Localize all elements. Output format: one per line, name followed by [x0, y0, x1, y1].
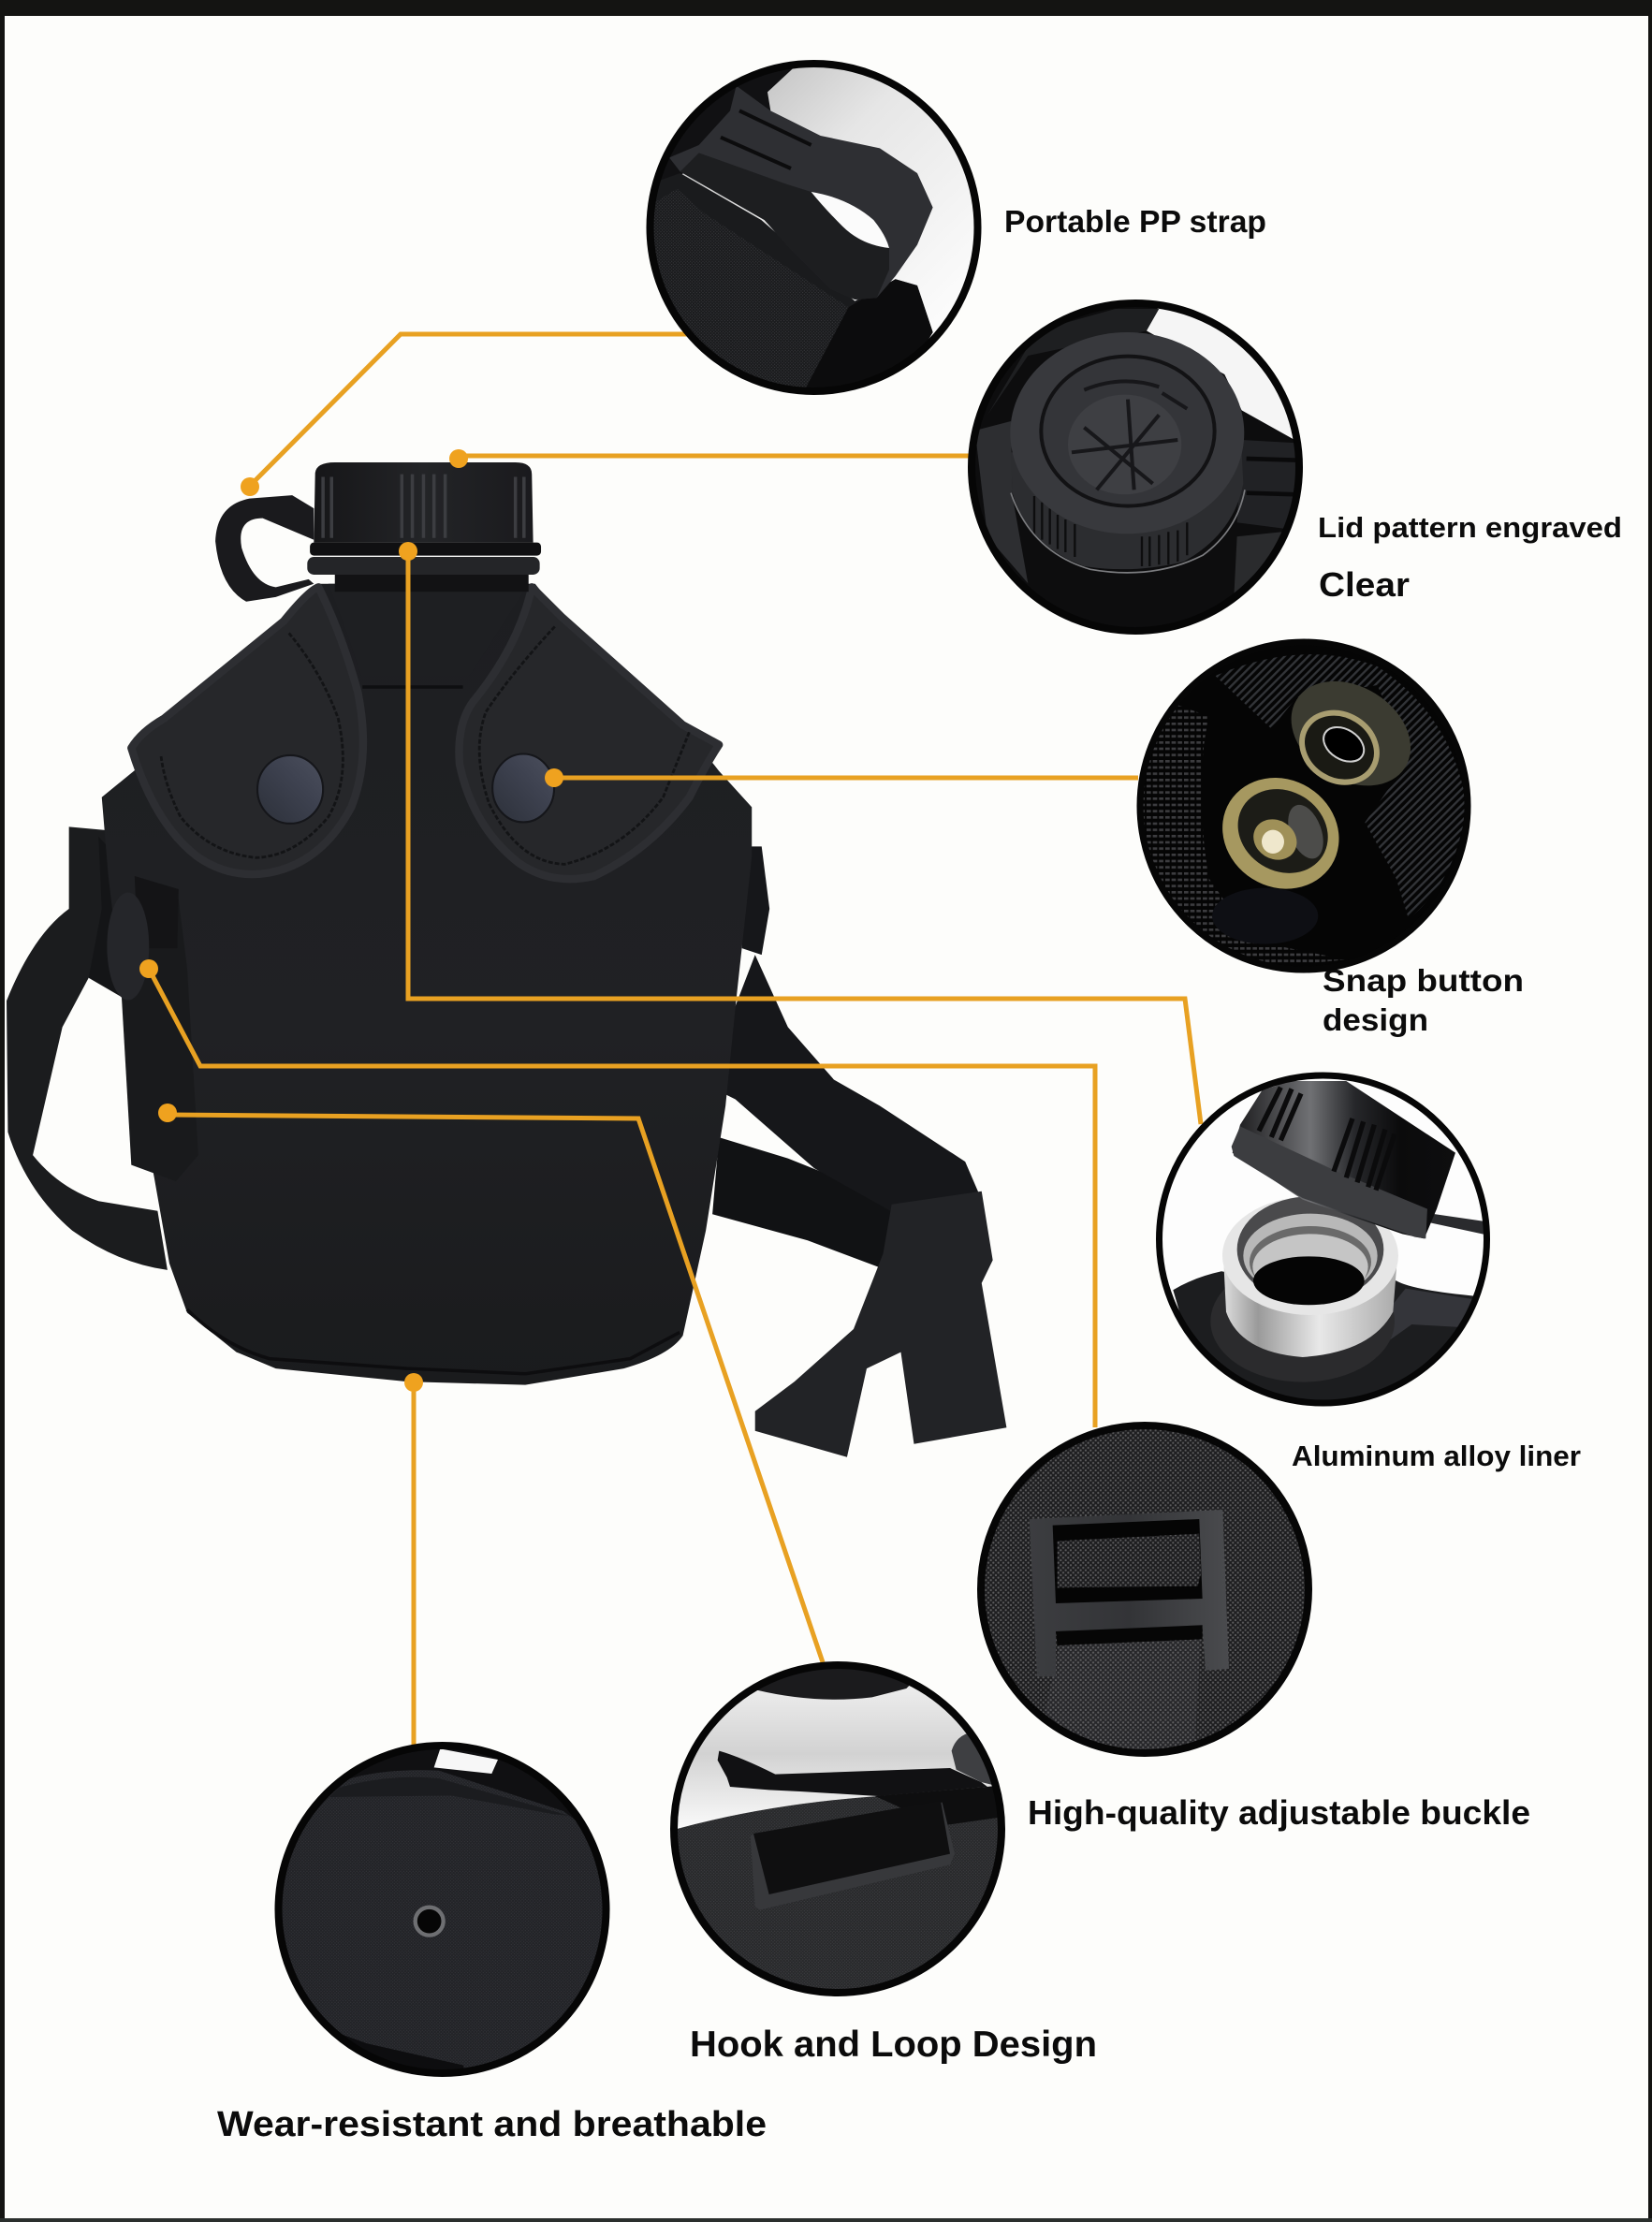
- right fins: [1237, 440, 1298, 531]
- skirt ribs: [1034, 496, 1187, 566]
- liner inside: [1237, 1196, 1383, 1303]
- cover body: [102, 584, 752, 1385]
- label: High-quality adjustable buckle: High-quality adjustable buckle: [1028, 1793, 1530, 1832]
- backdrop: [975, 307, 1294, 627]
- knob right: [952, 1732, 1006, 1789]
- engraved pattern: [1068, 395, 1181, 494]
- bag shadow: [807, 279, 933, 387]
- dark upper left: [661, 69, 793, 180]
- white gap: [434, 1748, 498, 1774]
- buckle frame: [1030, 1510, 1229, 1676]
- line: strap: [249, 334, 687, 487]
- label: Snap button design: design: [1323, 1002, 1428, 1037]
- pull strap: [1421, 1212, 1485, 1235]
- canteen base: [1173, 1271, 1493, 1411]
- right fabric: [1234, 532, 1282, 597]
- liner cylinder: [1223, 1250, 1397, 1357]
- upper opening: [1053, 1519, 1203, 1603]
- side panel: [122, 889, 198, 1181]
- grey wedge behind lid: [987, 309, 1159, 415]
- lid skirt: [1011, 452, 1243, 569]
- white background patch: [1147, 309, 1294, 439]
- strap tails: [755, 1191, 1006, 1457]
- lighter shoulder: [1387, 1289, 1474, 1340]
- cap ribs: [323, 475, 524, 538]
- left shoulder strap: [7, 826, 168, 1270]
- flap stitching: [161, 626, 690, 864]
- lower webbing: [1045, 1639, 1201, 1758]
- strap joint to buckle: [89, 837, 141, 1001]
- upper snap hole: [1323, 726, 1365, 763]
- eyelet: [416, 1908, 444, 1936]
- strap tab: [718, 1751, 987, 1796]
- detail circle: aluminum liner: [1156, 1073, 1490, 1406]
- hook and loop patch: [753, 1801, 950, 1894]
- cap rim: [307, 543, 541, 575]
- rear strap, upper run: [723, 955, 984, 1214]
- side strap tab: [135, 876, 179, 948]
- line: buckle: [149, 969, 1095, 1427]
- webbing in buckle: [1058, 1534, 1201, 1587]
- strap grooves: [721, 110, 811, 168]
- dark band right: [875, 1785, 1006, 1826]
- patch border: [751, 1803, 955, 1910]
- lid rim: [1232, 1126, 1427, 1238]
- lower snap ring: [1222, 778, 1338, 889]
- rim highlight: [1011, 490, 1245, 573]
- label: Clear: Clear: [1319, 565, 1410, 604]
- line: liner: [408, 550, 1201, 1124]
- detail circle: PP strap: [646, 60, 981, 395]
- lower snap well: [1237, 789, 1328, 873]
- left weave crescent: [1137, 704, 1346, 969]
- top dark edge: [738, 1660, 934, 1700]
- backdrop: [264, 1732, 620, 2087]
- label: Hook and Loop Design: Hook and Loop Design: [690, 2025, 1097, 2065]
- label: Wear-resistant and breathable: Wear-resistant and breathable: [217, 2105, 767, 2144]
- threads: [1243, 1214, 1378, 1298]
- strap: [669, 86, 933, 300]
- left flap: [131, 587, 363, 874]
- rear strap, lower run: [712, 1137, 899, 1270]
- upper snap ring: [1299, 709, 1380, 785]
- left fabric: [975, 421, 1028, 583]
- fabric weave: [264, 1732, 620, 2087]
- right side tab: [742, 846, 769, 955]
- bottom shadow: [332, 2031, 463, 2078]
- webbing weave: [1058, 1534, 1201, 1587]
- top dark edge: [327, 1741, 582, 1825]
- label: Lid pattern engraved: Lid pattern engraved: [1318, 511, 1622, 544]
- right snap button: [492, 753, 554, 822]
- carry loop: [215, 495, 314, 602]
- lid top: [1010, 332, 1244, 534]
- lid: [1233, 1081, 1455, 1238]
- label: Aluminum alloy liner: Aluminum alloy liner: [1292, 1440, 1581, 1472]
- bag weave: [677, 1785, 1006, 2000]
- line: snap: [554, 775, 1138, 781]
- bottle shoulder: [329, 584, 529, 676]
- lid inset: [1041, 357, 1215, 506]
- bottom seam: [187, 1309, 680, 1374]
- liner rim: [1222, 1196, 1398, 1315]
- label: Snap button design: [1323, 963, 1524, 1037]
- detail circle: hook and loop: [660, 1651, 1016, 2000]
- backdrop: [967, 1411, 1323, 1767]
- line: lid: [459, 453, 970, 459]
- lower opening: [1056, 1625, 1203, 1645]
- backdrop: [1147, 1062, 1502, 1418]
- bag panel: [677, 1785, 1006, 2000]
- fabric bag: [653, 174, 933, 387]
- backdrop: [681, 67, 972, 301]
- callout lines: [149, 334, 1201, 1745]
- side buckle: [107, 893, 149, 1001]
- detail circle: adjustable buckle: [967, 1411, 1323, 1767]
- detail circle: lid: [968, 300, 1303, 635]
- backdrop: [1144, 646, 1464, 966]
- liner opening: [1253, 1256, 1365, 1305]
- stud centre: [1262, 830, 1284, 854]
- right flap: [459, 587, 719, 879]
- fabric folds: [1212, 888, 1318, 944]
- lower snap highlight: [1288, 805, 1323, 859]
- detail circle: fabric: [264, 1732, 620, 2087]
- product: canteen in black cover: [7, 462, 1006, 1457]
- upper right weave: [1215, 654, 1467, 919]
- label: Snap button design: Snap button: [1323, 963, 1524, 998]
- upper snap base: [1292, 681, 1411, 786]
- fin grooves: [1247, 459, 1298, 494]
- lid ribs: [1259, 1088, 1395, 1191]
- shoulder seam: [362, 684, 463, 689]
- fabric weave: [653, 189, 848, 387]
- left snap button: [257, 755, 323, 824]
- callout dots: [139, 449, 563, 1392]
- lower snap stud: [1253, 819, 1297, 860]
- backdrop: [660, 1651, 1016, 1838]
- strap lower part: [680, 153, 889, 300]
- woven fabric: [967, 1411, 1323, 1767]
- lower webbing weave: [1045, 1639, 1201, 1758]
- line: hook and loop: [168, 1115, 823, 1662]
- line: fabric: [412, 1384, 416, 1745]
- detail circle: snap buttons: [1136, 638, 1471, 973]
- bottle neck: [335, 571, 529, 592]
- bottle cap: [314, 462, 534, 543]
- collar: [1210, 1261, 1395, 1382]
- label: Portable PP strap: Portable PP strap: [1004, 204, 1266, 239]
- strap hole: [811, 192, 889, 248]
- seam band: [329, 1777, 570, 1816]
- engraved lines: [1072, 381, 1187, 490]
